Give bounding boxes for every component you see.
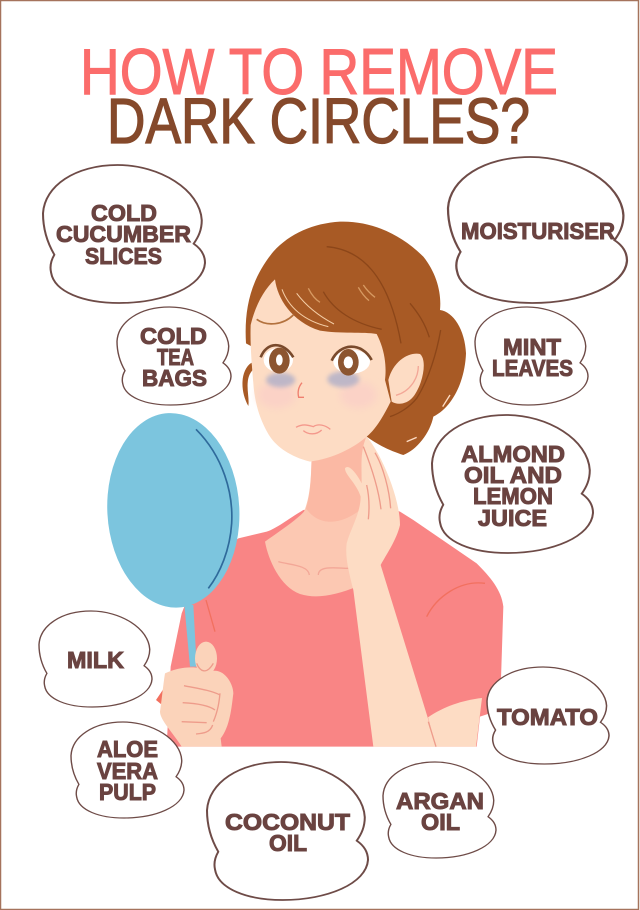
bubble: tomato: TOMATO: [497, 704, 598, 730]
bubble: coconut oil: [207, 762, 368, 900]
raised arm and hand: [345, 437, 437, 747]
left eye: [261, 345, 293, 374]
hair back and bun: [246, 222, 466, 455]
bubble: almond oil and lemon juice: ALMOND: [461, 441, 565, 467]
bubble: cold cucumber slices: CUCUMBER: [56, 221, 191, 247]
neck and chest: [265, 420, 367, 596]
nose: [298, 383, 304, 397]
bubble: argan oil: ARGAN: [396, 788, 484, 814]
holding hand: [156, 642, 233, 747]
bubble: cold cucumber slices: COLD: [91, 200, 157, 226]
bubble: cold cucumber slices: [43, 165, 205, 303]
title: DARK CIRCLES?: [107, 85, 530, 157]
bubble: moisturiser: [448, 157, 627, 303]
shirt folds: [206, 583, 485, 632]
eyebrow: [257, 315, 293, 324]
bubble: cold cucumber slices: SLICES: [85, 243, 162, 269]
side curl: [242, 363, 253, 406]
mirror handle: [184, 605, 197, 667]
shirt: [167, 500, 503, 747]
bubble: coconut oil: OIL: [269, 830, 307, 856]
blush: [257, 382, 377, 408]
bubble: argan oil: OIL: [421, 809, 460, 835]
bubble: tomato: [487, 667, 609, 764]
bubble: aloe vera pulp: [71, 722, 184, 818]
bubble: cold tea bags: BAGS: [142, 365, 207, 391]
bubble: argan oil: [383, 762, 496, 858]
bubble: coconut oil: COCONUT: [225, 809, 350, 835]
bubble: aloe vera pulp: VERA: [97, 758, 158, 784]
bubble: aloe vera pulp: PULP: [99, 779, 156, 805]
bubble: aloe vera pulp: ALOE: [97, 736, 158, 762]
title: HOW TO REMOVE: [80, 35, 558, 108]
bubble: mint leaves: MINT: [503, 334, 561, 360]
bubble: milk: MILK: [67, 647, 124, 673]
head: [242, 222, 466, 462]
bubble: mint leaves: [475, 307, 588, 405]
bubble: almond oil and lemon juice: LEMON: [473, 483, 553, 509]
exposed forearm: [428, 698, 482, 747]
bubble: almond oil and lemon juice: JUICE: [478, 505, 547, 531]
ear: [388, 354, 424, 404]
bubble: mint leaves: LEAVES: [492, 355, 573, 381]
bubble: moisturiser: MOISTURISER: [461, 218, 615, 244]
bubble: almond oil and lemon juice: OIL AND: [464, 462, 562, 488]
torso and mirror: [102, 410, 503, 747]
mouth: [296, 425, 330, 434]
woman illustration: [102, 222, 503, 747]
collarbone lines: [278, 562, 348, 575]
bubble: cold tea bags: [117, 307, 231, 405]
neck shadow: [306, 420, 367, 522]
bubble: cold tea bags: COLD: [140, 323, 207, 349]
mirror: [102, 410, 244, 611]
hair line details: [282, 247, 450, 442]
dark circles: [266, 371, 359, 387]
bubble: almond oil and lemon juice: [432, 415, 593, 553]
bubble: cold tea bags: TEA: [157, 344, 194, 370]
face: [251, 279, 391, 462]
bubble: milk: [39, 611, 152, 707]
right eye: [332, 347, 372, 376]
title: [80, 35, 558, 157]
